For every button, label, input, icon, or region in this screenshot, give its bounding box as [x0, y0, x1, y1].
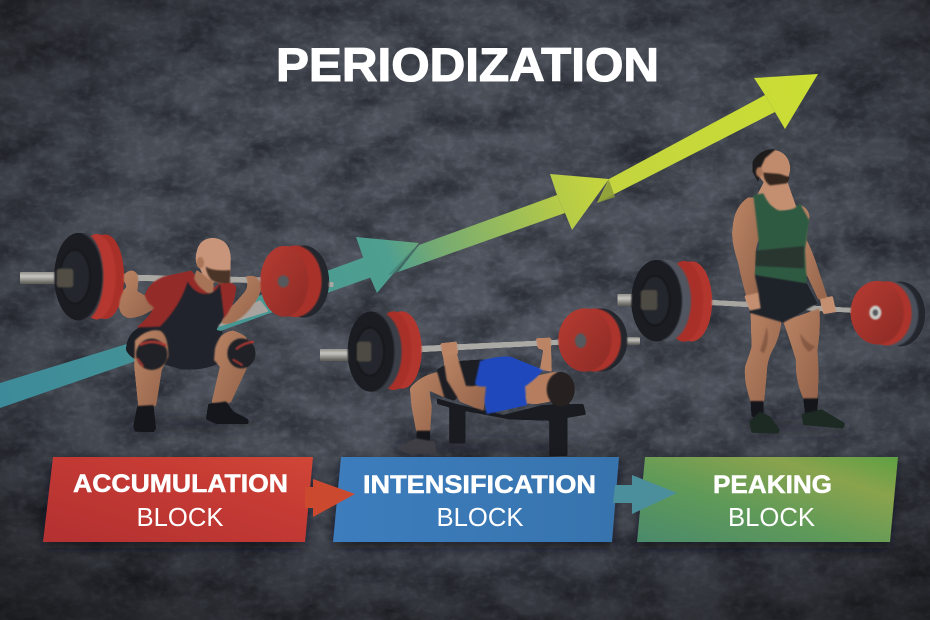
red t-shirt	[137, 271, 236, 328]
arrow fold shadow	[388, 245, 419, 275]
arrow segment: upper shaft	[597, 95, 775, 203]
blue shirt	[475, 357, 543, 414]
floor shadows	[125, 419, 855, 453]
left plates	[54, 233, 124, 320]
black singlet	[140, 282, 224, 370]
left plates	[631, 260, 712, 342]
shoes	[133, 401, 248, 432]
arms	[732, 197, 827, 299]
arrow segment: teal tail	[0, 257, 372, 408]
legs	[745, 308, 820, 402]
forearm and hands	[441, 338, 552, 372]
socks	[751, 398, 818, 417]
block shadows	[43, 462, 898, 548]
block: intensification: INTENSIFICATION	[363, 471, 596, 499]
block: peaking	[637, 457, 898, 542]
near arm	[443, 353, 486, 411]
green tank top	[753, 193, 809, 283]
squat bar	[123, 275, 287, 283]
lifter 3: deadlift	[617, 149, 925, 433]
arrowhead: middle	[550, 174, 609, 230]
tank shadow band	[756, 246, 804, 268]
left plates	[348, 311, 422, 392]
legs	[134, 330, 247, 406]
left sleeve	[617, 294, 649, 306]
title: PERIODIZATION	[276, 38, 659, 91]
hands	[744, 293, 836, 314]
left sleeve	[20, 272, 62, 284]
head	[194, 238, 231, 294]
block: peaking: PEAKING	[713, 471, 832, 499]
shorts	[126, 327, 152, 362]
knee wraps	[136, 338, 255, 370]
block: accumulation: BLOCK	[136, 502, 224, 532]
arrow: accumulation to intensification	[305, 479, 355, 517]
neck	[757, 180, 797, 211]
legs	[410, 371, 447, 433]
bar	[712, 300, 877, 314]
lifter 2: bench press	[320, 308, 640, 456]
lifter 1: back squat	[20, 233, 333, 432]
leg muscle shading	[760, 327, 815, 353]
block: intensification: BLOCK	[436, 502, 524, 532]
sock and shoe	[396, 431, 436, 454]
block: accumulation	[43, 457, 313, 542]
block: accumulation: ACCUMULATION	[73, 470, 288, 498]
bench	[437, 398, 586, 456]
gray arrow gap	[213, 300, 269, 328]
block: intensification	[333, 457, 619, 542]
arrowhead: top	[754, 74, 818, 129]
bar	[422, 339, 583, 352]
shorts	[749, 275, 817, 323]
hair	[547, 372, 575, 407]
left sleeve	[320, 349, 360, 361]
arms	[119, 271, 261, 324]
arrow segment: middle shaft	[398, 195, 565, 272]
shoes	[749, 409, 845, 433]
right plates	[260, 246, 333, 318]
block: peaking: BLOCK	[728, 502, 816, 532]
right plates	[851, 281, 925, 346]
right plates	[558, 308, 640, 372]
head	[753, 149, 790, 186]
face	[525, 372, 557, 404]
shorts	[437, 359, 485, 401]
rising progress arrow	[0, 74, 818, 408]
arrow: intensification to peaking	[613, 475, 677, 514]
arrowhead: teal	[356, 237, 419, 293]
